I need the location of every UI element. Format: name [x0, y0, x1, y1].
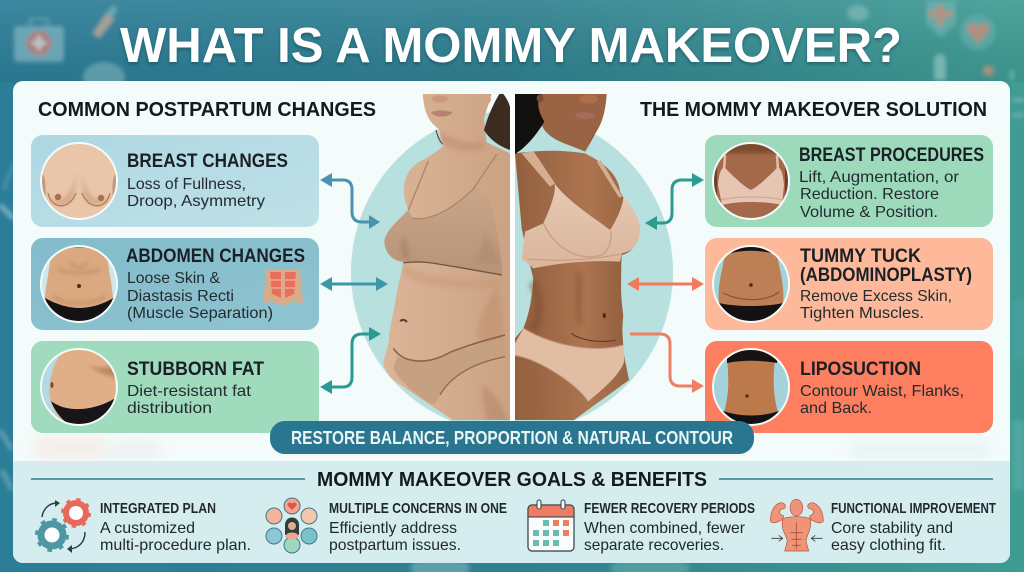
- icon: muscular figure: [770, 499, 823, 551]
- benefit: integrated plan: multi-procedure plan.: [100, 537, 251, 554]
- icon: gears: [37, 500, 89, 553]
- photo: tummy tuck: [711, 244, 791, 324]
- figure: postpartum body: [383, 94, 510, 422]
- icon: abdominal muscles: [263, 270, 303, 306]
- benefit: fewer recovery periods: FEWER RECOVERY PERIODS: [584, 500, 755, 517]
- benefit: fewer recovery periods: [528, 500, 755, 554]
- card: abdomen changes: (Muscle Separation): [127, 305, 273, 322]
- card: breast procedures: Volume & Position.: [800, 204, 938, 221]
- card: stubborn fat: distribution: [127, 400, 212, 417]
- banner: restore balance: [270, 421, 754, 454]
- benefit: multiple concerns in one: Efficiently address: [329, 520, 457, 537]
- benefit: multiple concerns in one: [266, 498, 507, 554]
- card: abdomen changes: Diastasis Recti: [127, 288, 234, 305]
- arrow: stubborn fat link: [320, 327, 381, 394]
- title: WHAT IS A MOMMY MAKEOVER?: [120, 19, 902, 73]
- card: tummy tuck: Remove Excess Skin,: [800, 288, 952, 305]
- icon: concerns cluster: [266, 498, 317, 553]
- card: breast procedures: BREAST PROCEDURES: [799, 145, 984, 166]
- icon: calendar: [528, 500, 574, 551]
- card: breast procedures: Reduction. Restore: [800, 186, 939, 203]
- divider between figures: [510, 94, 515, 421]
- card: breast changes: Droop, Asymmetry: [127, 193, 265, 210]
- card: liposuction: LIPOSUCTION: [800, 359, 921, 380]
- card: stubborn fat: [31, 341, 319, 433]
- benefit: integrated plan: INTEGRATED PLAN: [100, 500, 216, 517]
- card: stubborn fat: Diet-resistant fat: [127, 383, 252, 400]
- card: breast changes: [31, 135, 319, 227]
- card: breast procedures: Lift, Augmentation, or: [799, 169, 960, 186]
- photo: breast procedures: [711, 141, 791, 221]
- card: tummy tuck: [705, 238, 993, 330]
- benefit: multiple concerns in one: postpartum issues.: [329, 537, 461, 554]
- heading: goals and benefits: MOMMY MAKEOVER GOALS & BENEFITS: [317, 468, 707, 491]
- card: liposuction: [705, 341, 993, 433]
- photo: abdomen changes: [39, 244, 119, 324]
- benefit: integrated plan: [37, 500, 251, 554]
- heading: the mommy makeover solution: THE MOMMY MAKEOVER SOLUTION: [640, 98, 987, 121]
- benefit: functional improvement: easy clothing fit.: [831, 537, 946, 554]
- card: liposuction: Contour Waist, Flanks,: [800, 383, 964, 400]
- benefit: functional improvement: [770, 499, 996, 554]
- card: tummy tuck: Tighten Muscles.: [800, 305, 924, 322]
- arrow: breast changes link: [320, 173, 380, 229]
- benefit: fewer recovery periods: When combined, fewer: [584, 520, 746, 537]
- arrow: liposuction link: [630, 334, 704, 393]
- card: breast procedures: [705, 135, 993, 227]
- card: tummy tuck: (ABDOMINOPLASTY): [800, 265, 972, 286]
- benefit: multiple concerns in one: MULTIPLE CONCERNS IN ONE: [329, 500, 507, 517]
- photo: stubborn fat: [39, 347, 119, 427]
- card: abdomen changes: ABDOMEN CHANGES: [126, 246, 305, 267]
- card: breast changes: Loss of Fullness,: [127, 176, 246, 193]
- photo: breast changes: [39, 141, 119, 221]
- card: abdomen changes: Loose Skin &: [127, 270, 220, 287]
- arrow: breast procedures link: [645, 173, 704, 230]
- heading: common postpartum changes: COMMON POSTPARTUM CHANGES: [38, 98, 376, 121]
- card: liposuction: and Back.: [800, 400, 872, 417]
- photo: liposuction: [711, 347, 791, 428]
- figure: post-procedure body: [515, 94, 640, 422]
- card: abdomen changes: [31, 238, 319, 330]
- banner: restore balance: RESTORE BALANCE, PROPORTION & NATURAL CONTOUR: [291, 428, 733, 448]
- benefit: fewer recovery periods: separate recoveries.: [584, 537, 724, 554]
- benefit: functional improvement: Core stability and: [831, 520, 953, 537]
- card: breast changes: BREAST CHANGES: [127, 151, 288, 172]
- arrow: tummy tuck link: [627, 277, 704, 291]
- card: stubborn fat: STUBBORN FAT: [127, 359, 264, 380]
- teal circle behind figures: [351, 111, 673, 433]
- benefit: integrated plan: A customized: [100, 520, 195, 537]
- arrow: abdomen link: [320, 277, 388, 291]
- card: tummy tuck: TUMMY TUCK: [800, 246, 921, 267]
